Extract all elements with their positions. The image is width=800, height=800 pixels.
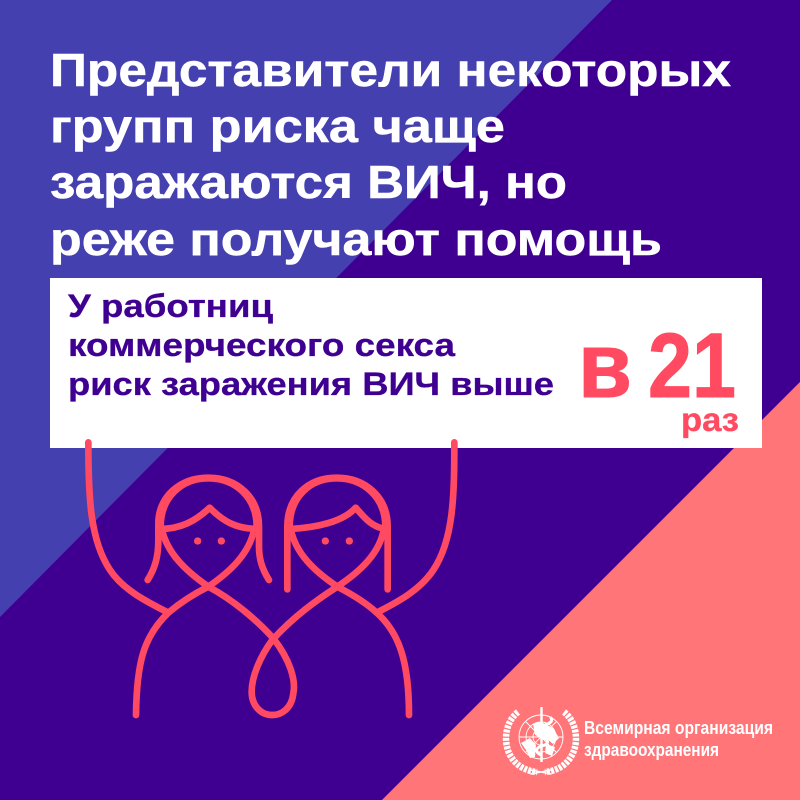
- icon: WHO emblem: [506, 707, 576, 774]
- banner text: риск заражения ВИЧ выше: [68, 366, 554, 402]
- organisation name: [584, 718, 773, 760]
- left arm: [88, 442, 168, 613]
- statistic: 21 times: в: [578, 313, 632, 417]
- right woman head: [287, 478, 388, 589]
- organisation name: Всемирная организация: [584, 718, 773, 738]
- statistic: 21 times: [578, 313, 739, 438]
- wreath: [506, 712, 576, 774]
- illustration: two women holding banner: [88, 442, 454, 715]
- banner text: [68, 288, 554, 402]
- staff and serpent: [536, 707, 552, 762]
- continents: [521, 722, 559, 758]
- title: заражаются ВИЧ, но: [50, 156, 567, 208]
- left woman head: [148, 478, 269, 587]
- statistic: 21 times: 21: [648, 315, 736, 417]
- title: Представители некоторых: [50, 44, 731, 96]
- right arm: [377, 442, 454, 613]
- globe: [519, 715, 563, 759]
- panel: white banner: [50, 278, 762, 448]
- banner text: У работниц: [68, 288, 273, 324]
- statistic: 21 times: раз: [681, 401, 739, 438]
- title: [50, 44, 731, 265]
- organisation name: здравоохранения: [584, 740, 719, 760]
- title: групп риска чаще: [50, 100, 505, 152]
- title: реже получают помощь: [50, 213, 662, 265]
- banner text: коммерческого секса: [68, 327, 455, 363]
- bodies and ribbon loop: [136, 587, 409, 715]
